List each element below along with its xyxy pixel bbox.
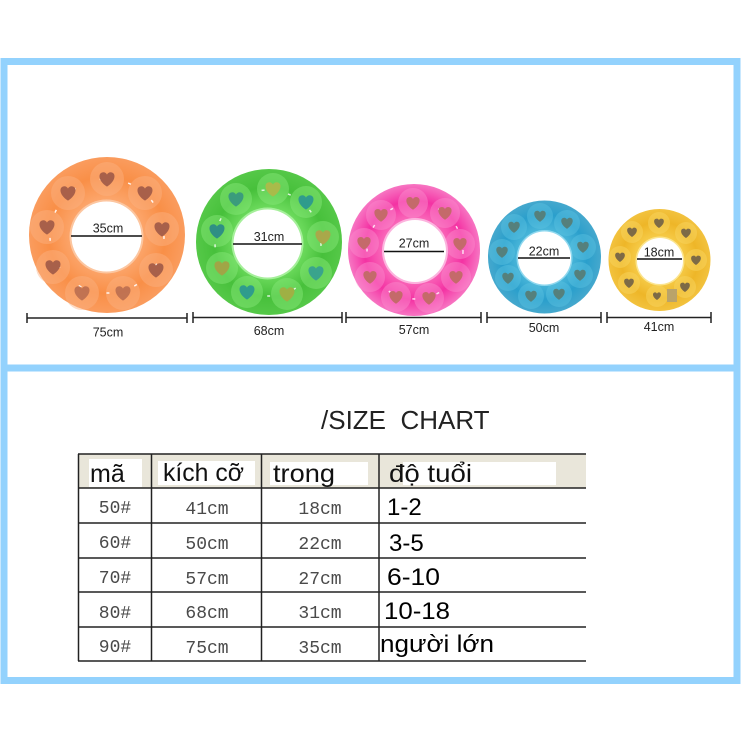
row 70# [99,564,440,591]
outer diameter measurements: 57cm [399,323,429,337]
inner diameter measurements: 18cm [644,246,674,260]
title: /SIZE CHART [321,405,490,435]
outer diameter measurements: 75cm [93,326,123,340]
row 90# [99,631,494,659]
row 60#: 60# [99,534,131,554]
outer diameter measurements: 68cm [254,324,284,338]
inner diameter measurements: 35cm [93,222,123,236]
row 50#: 1-2 [387,494,422,521]
inner diameter measurements [71,222,682,260]
row 80#: 80# [99,604,131,624]
frame: light blue border top panel [4,62,737,368]
outer diameter measurements [27,312,711,340]
row 70#: 70# [99,569,131,589]
row 50#: 50# [99,499,131,519]
table header: mã [90,460,125,488]
table header: trong [273,460,335,488]
inner diameter measurements: 31cm [254,230,284,244]
row 50#: 18cm [298,500,342,520]
row 60# [99,530,424,557]
table header [78,454,586,488]
inner diameter measurements: 22cm [529,244,559,258]
size chart table [78,454,586,661]
row 70#: 57cm [185,570,229,590]
row 80# [99,598,450,625]
row 90#: 90# [99,638,131,658]
row 80#: 31cm [298,604,342,624]
row 60#: 50cm [185,535,229,555]
frame: light blue border bottom panel [4,368,737,680]
row 50#: 41cm [185,500,229,520]
row 90#: người lớn [380,631,494,658]
pink swim ring 57cm [348,184,480,316]
table grid [78,454,586,661]
row 70#: 6-10 [387,564,440,591]
row 90#: 75cm [185,639,229,659]
row 60#: 22cm [298,535,342,555]
outer diameter measurements: 50cm [529,321,559,335]
row 80#: 68cm [185,604,229,624]
green swim ring 68cm [196,169,342,315]
inner diameter measurements: 27cm [399,236,429,250]
table header: kích cỡ [163,459,244,487]
row 50# [99,494,422,521]
outer diameter measurements: 41cm [644,320,674,334]
row 60#: 3-5 [389,530,424,557]
row 80#: 10-18 [384,598,450,625]
row 70#: 27cm [298,570,342,590]
row 90#: 35cm [298,639,342,659]
blue swim ring 50cm [488,200,601,314]
orange swim ring 75cm [29,157,185,313]
table header: độ tuổi [389,460,472,488]
yellow swim ring 41cm [608,209,710,311]
panel: swim ring sizes [27,157,711,340]
